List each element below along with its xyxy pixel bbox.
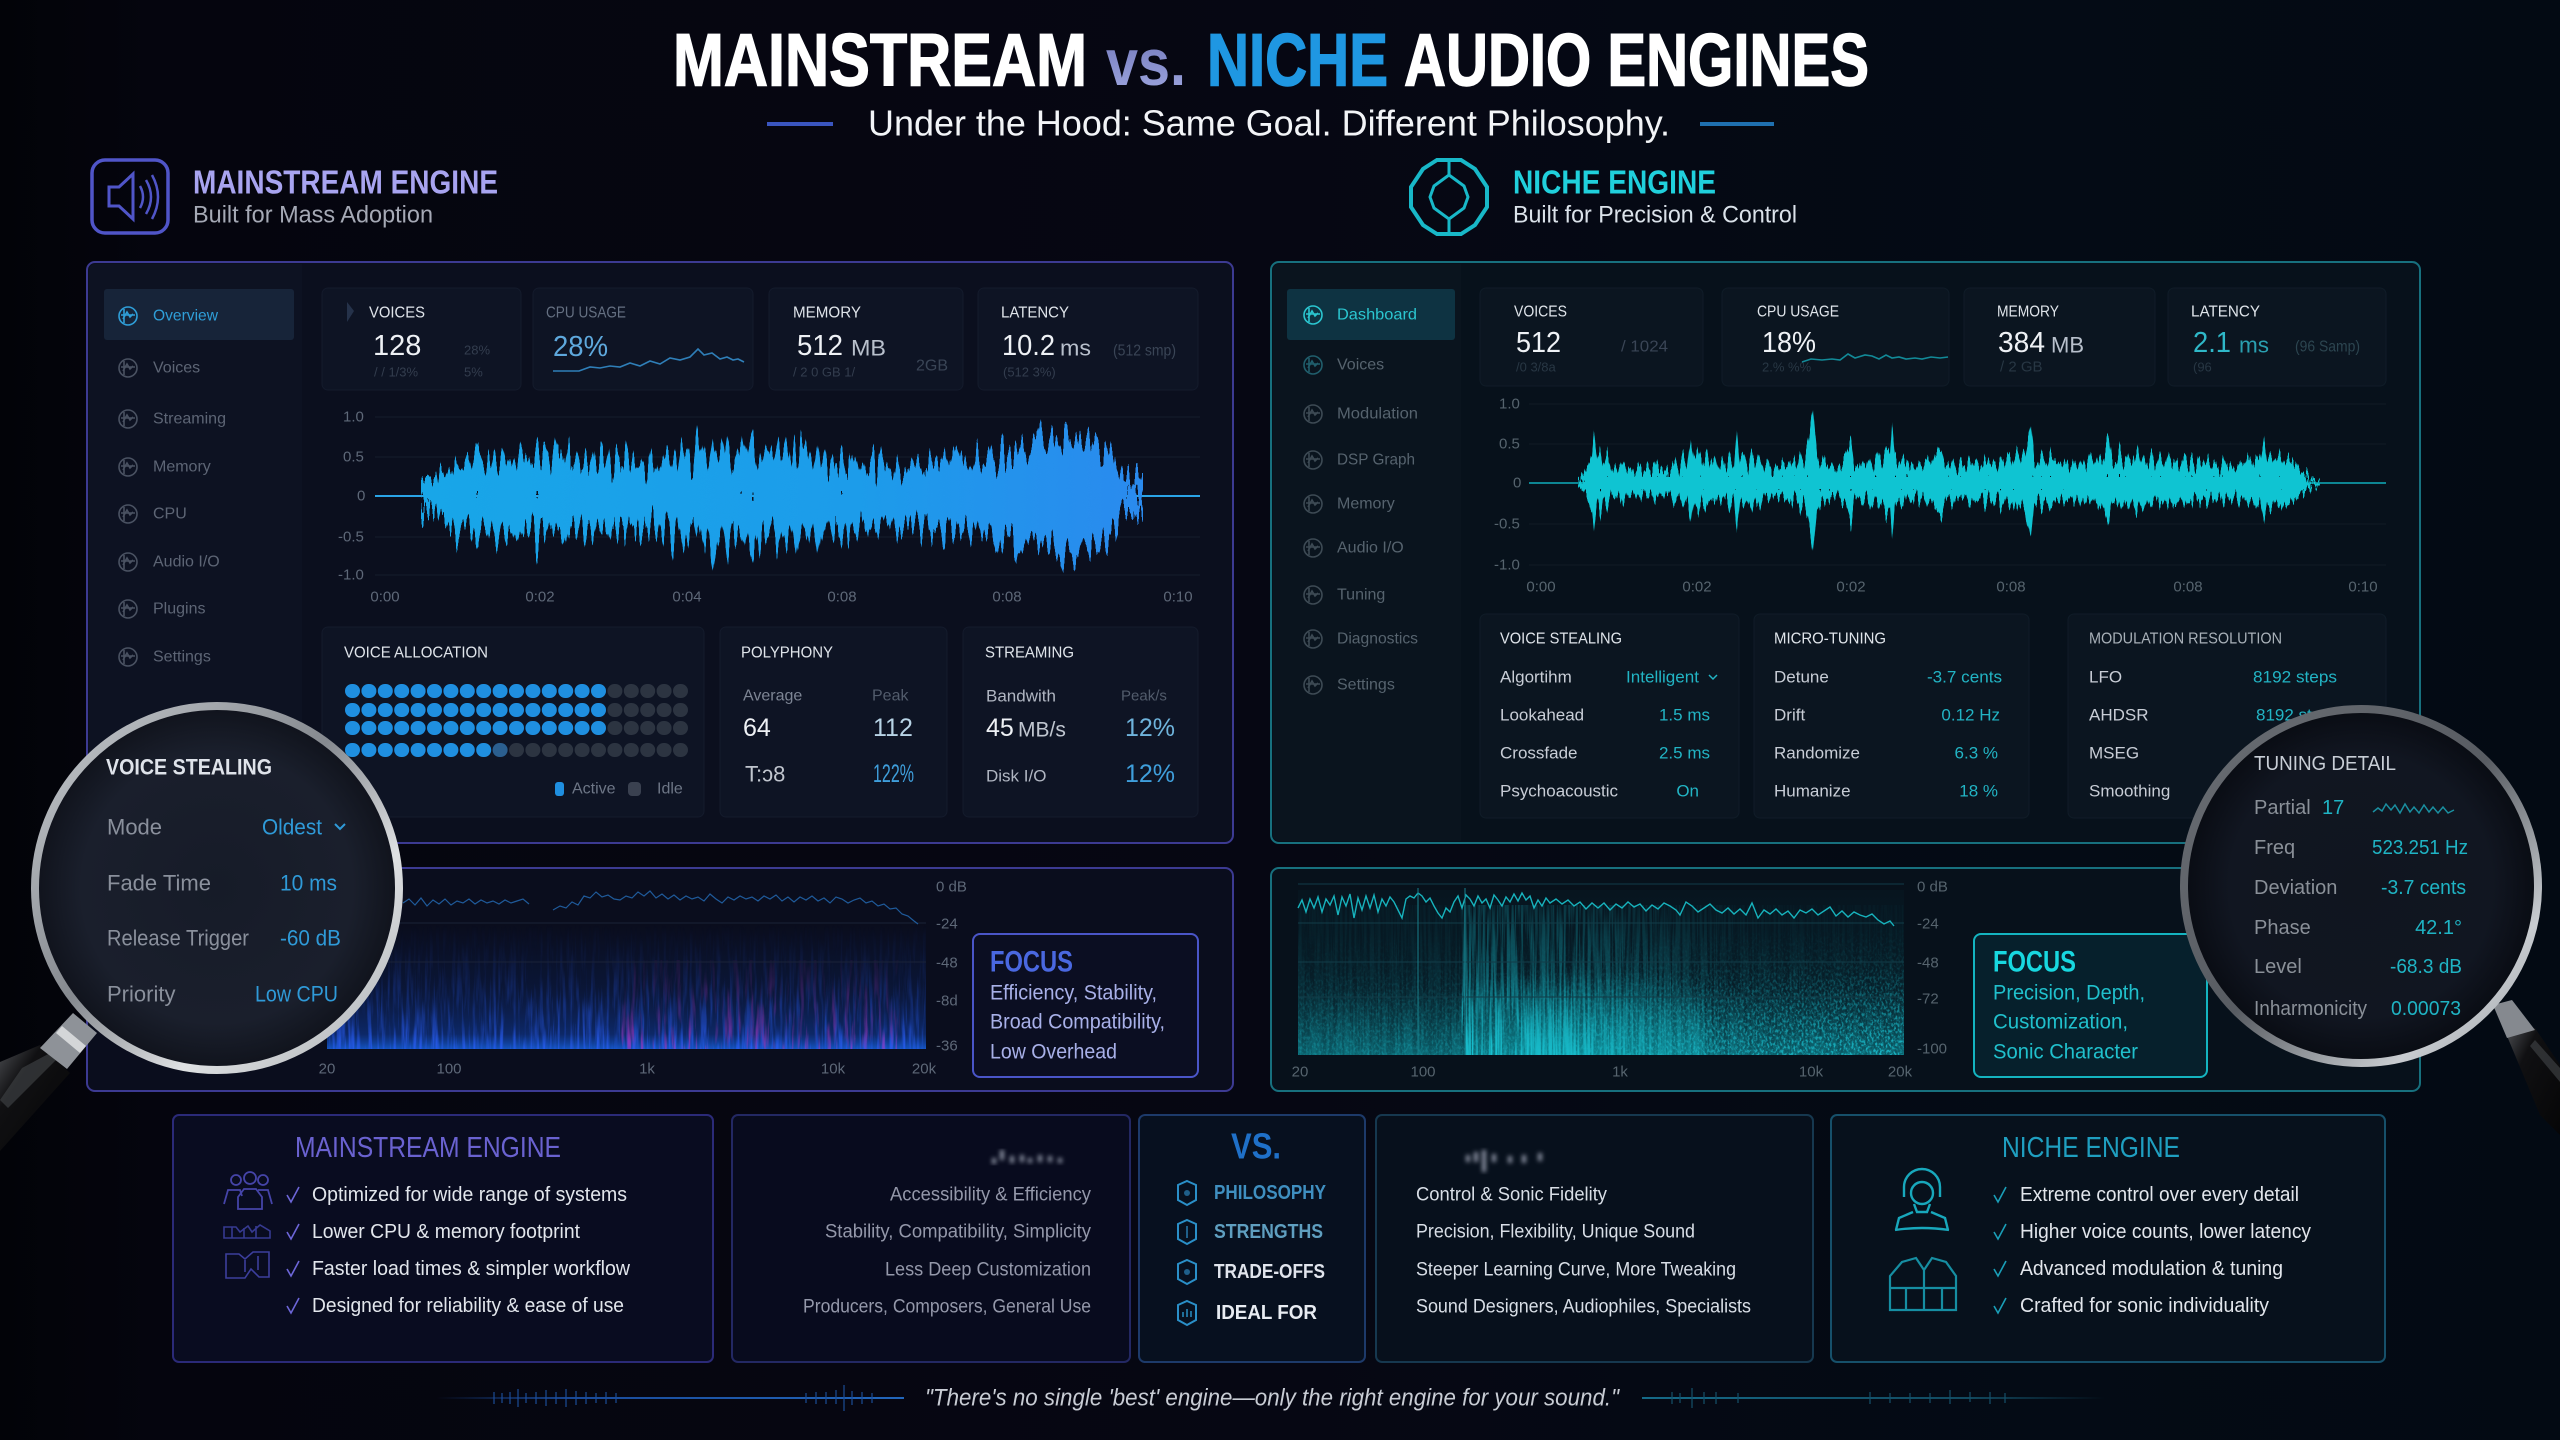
card: modulation resolution: Smoothing	[2089, 782, 2170, 800]
lens rows: Oldest	[262, 814, 322, 840]
stat card: latency	[978, 288, 1198, 390]
waveform chart: 0:00	[370, 588, 400, 606]
dB axis: -100	[1917, 1040, 1947, 1058]
waveform chart: 0.5	[1499, 436, 1520, 452]
tagline: Built for Precision & Control	[1513, 202, 1797, 228]
subtitle: Under the Hood: Same Goal. Different Philosophy.	[868, 102, 1670, 144]
sidebar: Audio I/O	[153, 554, 220, 570]
panel: niche comparison values	[1376, 1115, 1813, 1362]
card: polyphony	[720, 627, 947, 817]
checklist: Faster load times & simpler workflow	[312, 1258, 631, 1280]
callout: focus: Sonic Character	[1993, 1040, 2138, 1064]
stat card: memory: MB	[2051, 332, 2084, 358]
stat card: latency: (96	[2193, 360, 2212, 374]
stat card: voices: VOICES	[1514, 304, 1567, 320]
stat card: latency: (96 Samp)	[2295, 338, 2360, 356]
card: modulation resolution: MSEG	[2089, 744, 2139, 762]
stat card: latency: (512 3%)	[1003, 364, 1056, 380]
waveform chart: 0:08	[1996, 578, 2026, 596]
card: streaming: Disk I/O	[986, 766, 1046, 786]
sidebar: Voices	[1337, 356, 1384, 374]
checklist	[287, 1184, 631, 1317]
lens rows: -3.7 cents	[2381, 877, 2466, 899]
panel: mainstream dashboard	[87, 262, 1233, 843]
card: polyphony: T:ɔ8	[745, 762, 785, 786]
lens rows	[2254, 797, 2468, 1020]
stat card: voices: VOICES	[369, 304, 425, 322]
stat card: latency: LATENCY	[1001, 304, 1069, 322]
card: micro-tuning	[1754, 614, 2029, 818]
sidebar	[1273, 264, 1461, 841]
frequency axis: 20k	[1888, 1064, 1913, 1080]
lens rows: Freq	[2254, 837, 2295, 859]
callout: focus: Low Overhead	[990, 1040, 1117, 1064]
callout: focus	[1974, 934, 2207, 1077]
card: voice allocation: Active	[572, 780, 616, 798]
callout: focus: FOCUS	[990, 946, 1073, 978]
card: polyphony: POLYPHONY	[741, 644, 833, 662]
waveform chart	[1494, 396, 2386, 596]
sidebar: DSP Graph	[1337, 452, 1415, 468]
waveform chart: -1.0	[1494, 556, 1520, 574]
stat card: voices	[1480, 288, 1703, 386]
waveform chart: 0:10	[2348, 578, 2378, 596]
card: modulation resolution	[2068, 614, 2386, 818]
stat card: voices: 128	[373, 330, 421, 362]
frequency axis	[1292, 1064, 1913, 1080]
panel: mainstream spectrum	[87, 868, 1233, 1091]
heading: VS.	[1231, 1126, 1281, 1166]
panel: mainstream comparison values: Stability, Compatibility, Simplicity	[825, 1222, 1091, 1242]
icon: speaker	[92, 160, 168, 233]
card: modulation resolution: 8192 steps	[2253, 668, 2337, 686]
panel: vs categories	[1139, 1115, 1365, 1362]
lens heading: VOICE STEALING	[106, 754, 272, 780]
stat card: CPU usage: 28%	[553, 331, 608, 363]
stat card: memory: 512	[797, 330, 843, 362]
callout: focus: Customization,	[1993, 1010, 2128, 1034]
stat card: latency: 2.1	[2193, 327, 2231, 359]
lens rows: Deviation	[2254, 877, 2337, 899]
panel: niche comparison values: Control & Sonic Fidelity	[1416, 1184, 1607, 1206]
lens rows: 523.251 Hz	[2372, 837, 2468, 859]
stat card: voices: 28%	[464, 342, 490, 358]
card: polyphony: Peak	[872, 688, 909, 704]
header: niche engine	[1411, 160, 1797, 234]
stat card: CPU usage	[533, 288, 753, 390]
card: voice allocation: Idle	[657, 780, 683, 798]
frequency axis: 10k	[821, 1060, 846, 1078]
card: voice stealing: 1.5 ms	[1659, 706, 1710, 724]
card: voice stealing	[1480, 614, 1739, 818]
panel: mainstream summary	[173, 1115, 713, 1362]
icon: layered vest	[1890, 1258, 1956, 1310]
waveform chart	[338, 408, 1200, 606]
card: voice stealing: 2.5 ms	[1659, 744, 1710, 762]
card: polyphony: 122%	[873, 760, 914, 788]
card: streaming: 12%	[1125, 760, 1175, 788]
sidebar: Audio I/O	[1337, 540, 1404, 556]
stat card: memory: 384	[1998, 327, 2045, 359]
sidebar: Settings	[153, 648, 211, 666]
card: polyphony: 112	[873, 714, 913, 742]
lens rows: Mode	[107, 814, 162, 840]
stat card: voices: / 1024	[1621, 338, 1668, 356]
waveform chart: 0:08	[992, 588, 1022, 606]
waveform chart: -1.0	[338, 566, 364, 584]
card: modulation resolution: MODULATION RESOLUTION	[2089, 630, 2282, 648]
card: voice stealing: Crossfade	[1500, 744, 1577, 762]
card: micro-tuning: MICRO-TUNING	[1774, 630, 1886, 648]
card: micro-tuning: 0.12 Hz	[1941, 706, 2000, 724]
card: polyphony: 64	[743, 714, 771, 742]
sidebar: Modulation	[1337, 406, 1418, 422]
stat card: memory: MEMORY	[793, 304, 861, 322]
frequency axis: 20	[1292, 1064, 1308, 1080]
card: streaming	[963, 627, 1198, 817]
dB axis: -8d	[936, 992, 958, 1010]
frequency axis: 20k	[912, 1060, 937, 1078]
icon: octagon	[1411, 160, 1487, 234]
lens rows: Partial	[2254, 797, 2311, 819]
row: philosophy	[1178, 1181, 1327, 1205]
waveform chart: -0.5	[338, 528, 364, 546]
header: mainstream engine	[92, 160, 498, 233]
title	[673, 18, 1869, 102]
sidebar	[89, 264, 302, 841]
sidebar: Memory	[153, 458, 211, 476]
dB axis: -48	[1917, 954, 1939, 972]
row: philosophy: PHILOSOPHY	[1214, 1182, 1327, 1204]
stat card: latency	[2168, 288, 2386, 386]
sidebar: Voices	[153, 360, 200, 376]
checklist: Extreme control over every detail	[2020, 1184, 2299, 1206]
waveform chart: 1.0	[1499, 396, 1520, 412]
panel: niche comparison values: Precision, Flexibility, Unique Sound	[1416, 1222, 1695, 1242]
checklist	[1994, 1184, 2311, 1317]
card: streaming: MB/s	[1018, 718, 1066, 742]
row: strengths: STRENGTHS	[1214, 1221, 1323, 1243]
icon: workflow	[226, 1252, 269, 1278]
sidebar: Settings	[1337, 676, 1395, 694]
card: micro-tuning: Humanize	[1774, 782, 1851, 800]
card: micro-tuning: Detune	[1774, 668, 1829, 686]
row: ideal for: IDEAL FOR	[1216, 1302, 1318, 1324]
callout: focus: Precision, Depth,	[1993, 982, 2145, 1004]
waveform chart: 0:02	[1836, 578, 1866, 596]
frequency axis: 1k	[1612, 1064, 1628, 1080]
lens rows	[107, 814, 345, 1006]
decorative wave right	[1642, 1388, 2105, 1408]
lens rows: Priority	[107, 982, 175, 1006]
waveform chart: 1.0	[343, 408, 364, 426]
waveform chart: -0.5	[1494, 516, 1520, 532]
waveform chart: 0:08	[2173, 578, 2203, 596]
callout: focus	[973, 934, 1198, 1077]
stat card: memory: MEMORY	[1997, 304, 2059, 320]
card: modulation resolution: AHDSR	[2089, 706, 2149, 724]
sidebar: Overview	[153, 308, 218, 324]
stat card: latency: ms	[2239, 332, 2269, 358]
card: streaming: STREAMING	[985, 644, 1074, 662]
stat card: latency: ms	[1060, 336, 1091, 360]
waveform chart: 0.5	[343, 448, 364, 466]
heading: NICHE ENGINE	[1513, 164, 1716, 200]
frequency axis: 100	[436, 1060, 462, 1078]
row: ideal for	[1178, 1301, 1318, 1325]
lens rows: -68.3 dB	[2390, 956, 2462, 978]
card: voice stealing: Psychoacoustic	[1500, 782, 1618, 800]
dB axis: 0 dB	[936, 878, 967, 896]
lens rows: 17	[2322, 797, 2344, 819]
checklist: Crafted for sonic individuality	[2020, 1295, 2269, 1317]
stat card: voices: 512	[1516, 327, 1561, 359]
lens rows: 42.1°	[2415, 917, 2462, 939]
card: streaming: 12%	[1125, 714, 1175, 742]
stat card: memory: 2GB	[916, 358, 948, 374]
panel: mainstream comparison values: Producers, Composers, General Use	[803, 1296, 1091, 1318]
stat card: CPU usage: CPU USAGE	[1757, 304, 1839, 320]
stat card: CPU usage: 18%	[1762, 327, 1816, 359]
waveform chart: 0:04	[672, 588, 702, 606]
stat card: CPU usage: CPU USAGE	[546, 304, 626, 322]
title: MAINSTREAM	[673, 18, 1087, 102]
card: micro-tuning: Randomize	[1774, 744, 1860, 762]
stat card: memory	[1964, 288, 2155, 386]
icon: headphone user	[1895, 1169, 1949, 1230]
card: polyphony: Average	[743, 688, 802, 704]
spectrogram	[1298, 884, 1904, 1055]
stat card: voices: /0 3/8a	[1516, 360, 1557, 374]
card: voice allocation: VOICE ALLOCATION	[344, 644, 488, 662]
decorative wave left	[437, 1385, 904, 1411]
stat card: memory: / 2 GB	[2000, 358, 2043, 376]
frequency axis: 100	[1410, 1064, 1436, 1080]
sidebar: CPU	[153, 506, 187, 522]
lens rows: 0.00073	[2391, 998, 2461, 1020]
lens rows: Low CPU	[255, 982, 338, 1006]
tagline: Built for Mass Adoption	[193, 202, 433, 228]
frequency axis	[319, 1060, 937, 1078]
panel: niche spectrum	[1271, 868, 2420, 1091]
panel: niche comparison values: Steeper Learning Curve, More Tweaking	[1416, 1260, 1736, 1280]
stat card: CPU usage	[1722, 288, 1949, 386]
waveform chart: 0:08	[827, 588, 857, 606]
title: AUDIO ENGINES	[1404, 18, 1869, 102]
checklist: Designed for reliability & ease of use	[312, 1295, 624, 1317]
lens rows: 10 ms	[280, 870, 337, 896]
card: micro-tuning: Drift	[1774, 706, 1805, 724]
dB axis: -24	[936, 916, 958, 932]
dB axis	[936, 878, 967, 1054]
lens heading: TUNING DETAIL	[2254, 753, 2396, 775]
stat card: memory	[769, 288, 963, 390]
dB axis	[1917, 878, 1948, 1058]
heading: NICHE ENGINE	[2002, 1132, 2180, 1164]
spectrogram	[327, 891, 926, 1049]
frequency axis: 20	[319, 1060, 335, 1078]
lens rows: Release Trigger	[107, 926, 249, 950]
sidebar: Tuning	[1337, 586, 1385, 604]
checklist: Optimized for wide range of systems	[312, 1184, 627, 1206]
panel: mainstream comparison values: Accessibility & Efficiency	[890, 1184, 1091, 1206]
stat card: CPU usage: 2.% %%	[1762, 360, 1812, 374]
sidebar: Memory	[1337, 496, 1395, 512]
sidebar: Dashboard	[1337, 306, 1417, 324]
stat card: latency: 10.2	[1002, 330, 1055, 362]
stat card: voices	[322, 288, 521, 390]
stat card: latency: LATENCY	[2191, 304, 2260, 320]
waveform chart: 0	[357, 488, 365, 504]
card: modulation resolution: 8192 steps	[2256, 706, 2339, 724]
stat card: voices: 5%	[464, 364, 483, 380]
checklist: Advanced modulation & tuning	[2020, 1258, 2283, 1280]
row: strengths	[1178, 1220, 1323, 1244]
sidebar: Streaming	[153, 410, 226, 428]
lens rows: -60 dB	[280, 926, 341, 950]
lens rows: Inharmonicity	[2254, 998, 2367, 1020]
dB axis: 0 dB	[1917, 878, 1948, 896]
lens rows: Fade Time	[107, 870, 211, 896]
card: voice stealing: Intelligent	[1626, 668, 1699, 686]
panel: mainstream comparison values: Less Deep Customization	[885, 1260, 1091, 1280]
dB axis: -48	[936, 954, 958, 972]
card: modulation resolution: Vector	[2256, 744, 2305, 762]
stat card: voices: / / 1/3%	[374, 364, 419, 380]
waveform chart: 0	[1513, 474, 1521, 492]
heading: MAINSTREAM ENGINE	[193, 164, 498, 200]
card: voice stealing: VOICE STEALING	[1500, 630, 1622, 648]
card: micro-tuning: 18 %	[1959, 782, 1998, 800]
dB axis: -72	[1917, 990, 1939, 1008]
callout: focus: Efficiency, Stability,	[990, 982, 1157, 1004]
callout: focus: FOCUS	[1993, 946, 2076, 978]
sidebar: Plugins	[153, 600, 205, 618]
card: modulation resolution: LFO	[2089, 668, 2122, 686]
checklist: Higher voice counts, lower latency	[2020, 1221, 2311, 1243]
title: NICHE	[1207, 18, 1388, 102]
panel: niche summary	[1831, 1115, 2385, 1362]
icon: memory	[224, 1225, 270, 1238]
stat card: memory: MB	[851, 336, 886, 360]
frequency axis: 1k	[639, 1060, 655, 1078]
waveform chart: 0:10	[1163, 588, 1193, 606]
waveform chart: 0:02	[1682, 578, 1712, 596]
frequency axis: 10k	[1799, 1064, 1824, 1080]
stat card: memory: / 2 0 GB 1/	[793, 364, 856, 380]
sidebar: Diagnostics	[1337, 630, 1418, 648]
lens rows: Phase	[2254, 917, 2311, 939]
magnifier: voice stealing	[0, 706, 399, 1151]
row: trade-offs: TRADE-OFFS	[1214, 1261, 1325, 1283]
stat card: latency: (512 smp)	[1113, 342, 1176, 360]
card: micro-tuning: 6.3 %	[1955, 744, 1998, 762]
row: trade-offs	[1178, 1260, 1325, 1284]
card: voice allocation	[322, 627, 704, 817]
quote: "There's no single 'best' engine—only the right engine for your sound."	[925, 1384, 1620, 1412]
card: streaming: Peak/s	[1121, 688, 1167, 704]
lens rows: Level	[2254, 956, 2302, 978]
icon: users	[224, 1172, 272, 1209]
dB axis: -36	[936, 1038, 958, 1054]
title: vs.	[1106, 25, 1186, 99]
waveform chart: 0:00	[1526, 578, 1556, 596]
card: streaming: Bandwith	[986, 686, 1056, 706]
panel: mainstream comparison values	[732, 1115, 1130, 1362]
card: streaming: 45	[986, 714, 1014, 742]
card: voice stealing: Algortihm	[1500, 668, 1572, 686]
dB axis: -24	[1917, 916, 1939, 932]
panel: niche comparison values: Sound Designers, Audiophiles, Specialists	[1416, 1296, 1751, 1318]
waveform chart: 0:02	[525, 588, 555, 606]
heading: MAINSTREAM ENGINE	[295, 1132, 561, 1164]
card: micro-tuning: -3.7 cents	[1927, 668, 2002, 686]
panel: niche dashboard	[1271, 262, 2420, 843]
checklist: Lower CPU & memory footprint	[312, 1221, 580, 1243]
card: voice stealing: Lookahead	[1500, 706, 1584, 724]
callout: focus: Broad Compatibility,	[990, 1010, 1165, 1034]
card: voice stealing: On	[1676, 782, 1699, 800]
magnifier: tuning detail	[2184, 709, 2560, 1135]
